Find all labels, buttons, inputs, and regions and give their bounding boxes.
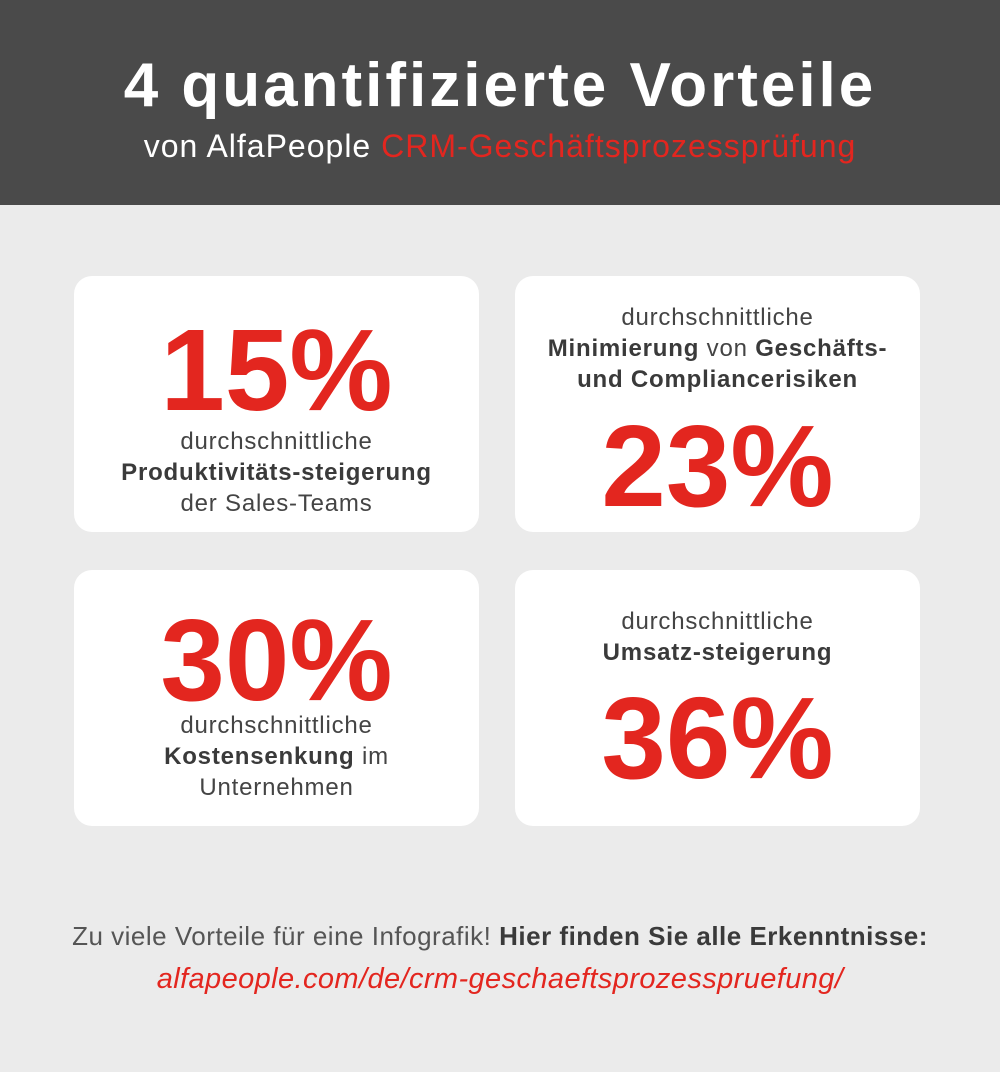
text	[548, 304, 887, 393]
text	[121, 428, 432, 517]
text: Umsatz-steigerung	[603, 639, 832, 666]
text: durchschnittliche	[180, 428, 373, 455]
number 23%: 23%	[601, 401, 834, 531]
panel: 30%	[74, 570, 479, 826]
text: und Compliancerisiken	[577, 366, 858, 393]
title: 4 quantifizierte Vorteile	[124, 51, 876, 120]
number 15%: 15%	[160, 305, 393, 435]
text: Minimierung von Geschäfts-	[548, 335, 887, 362]
text	[603, 608, 832, 666]
panel: 36%	[515, 570, 920, 826]
header	[0, 0, 1000, 205]
text: durchschnittliche	[621, 304, 814, 331]
panel: 23%	[515, 276, 920, 532]
text: Produktivitäts-steigerung	[121, 459, 432, 486]
number 36%: 36%	[601, 673, 834, 803]
text: durchschnittliche	[621, 608, 814, 635]
text: der Sales-Teams	[180, 490, 373, 517]
text: Kostensenkung im	[164, 743, 389, 770]
panel: 15%	[74, 276, 479, 532]
text: durchschnittliche	[180, 712, 373, 739]
footer text: Zu viele Vorteile für eine Infografik! Hier finden Sie alle Erkenntnisse:	[72, 921, 928, 951]
number 30%: 30%	[160, 595, 393, 725]
link: alfapeople.com/de/crm-geschaeftsprozesspruefung/	[157, 963, 843, 995]
subtitle: von AlfaPeople CRM-Geschäftsprozessprüfung	[144, 128, 856, 164]
text	[164, 712, 389, 801]
text: Unternehmen	[199, 774, 354, 801]
